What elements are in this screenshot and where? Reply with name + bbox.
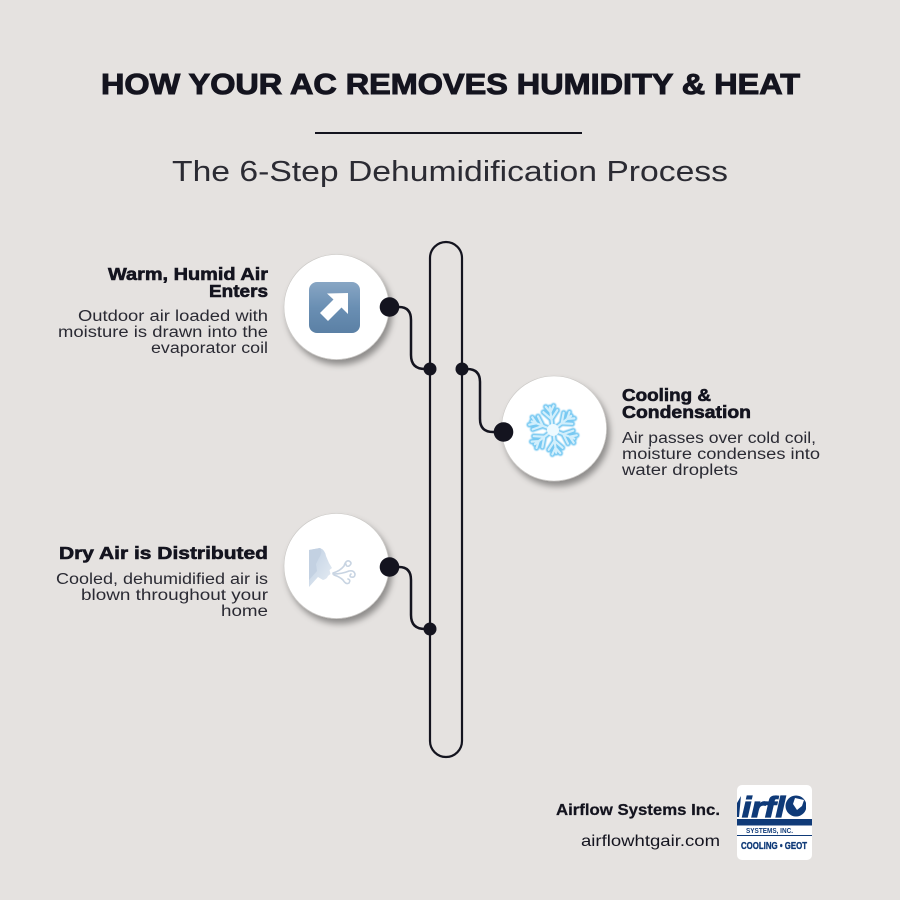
logo: SYSTEMS, INC. [746,828,793,835]
step 2 text: cooling and condensation: Air passes over cold coil, [622,430,816,447]
logo: irfl [742,792,786,824]
step 3 text: dry air is distributed: Cooled, dehumidified air is [56,571,268,588]
step 1 connector [380,297,436,376]
icon: up-right arrow [309,282,360,333]
step 2 text: cooling and condensation: moisture condenses into [622,446,820,463]
step 3 text: dry air is distributed: home [221,603,268,620]
step 1 text: warm, humid air enters: Outdoor air loaded with [78,308,268,325]
title: HOW YOUR AC REMOVES HUMIDITY & HEAT [101,69,800,101]
step 2 text: cooling and condensation [621,385,820,479]
step 2 node: snowflake icon [494,376,606,481]
step 2 text: cooling and condensation: Cooling & [622,385,711,405]
step 1 text: warm, humid air enters: Enters [209,281,268,301]
step 1 text: warm, humid air enters: moisture is drawn into the [58,324,268,341]
step 2 connector [456,362,503,432]
logo: COOLING • GEOT [741,841,807,852]
step 1 text: warm, humid air enters: Warm, Humid Air [108,264,268,284]
step 1 text: warm, humid air enters: evaporator coil [151,340,268,357]
step 2 text: cooling and condensation: Condensation [622,402,751,422]
step 3 node: blowing wind face icon [284,514,389,618]
step 3 text: dry air is distributed: Dry Air is Distributed [59,543,268,563]
logo [737,785,812,860]
icon: wind face [309,548,355,587]
infographic canvas [56,73,820,860]
footer website: airflowhtgair.com [581,833,720,850]
central pipeline track [430,242,462,757]
icon: snowflake [526,403,580,457]
footer company name: Airflow Systems Inc. [556,802,720,819]
step 2 text: cooling and condensation: water droplets [621,462,738,479]
subtitle: The 6-Step Dehumidification Process [172,156,728,188]
step 1 text: warm, humid air enters [58,264,268,357]
step 1 node: arrow icon [284,254,389,360]
step 3 connector [380,557,436,636]
step 3 text: dry air is distributed [56,543,268,620]
step 3 text: dry air is distributed: blown throughout your [81,587,268,604]
